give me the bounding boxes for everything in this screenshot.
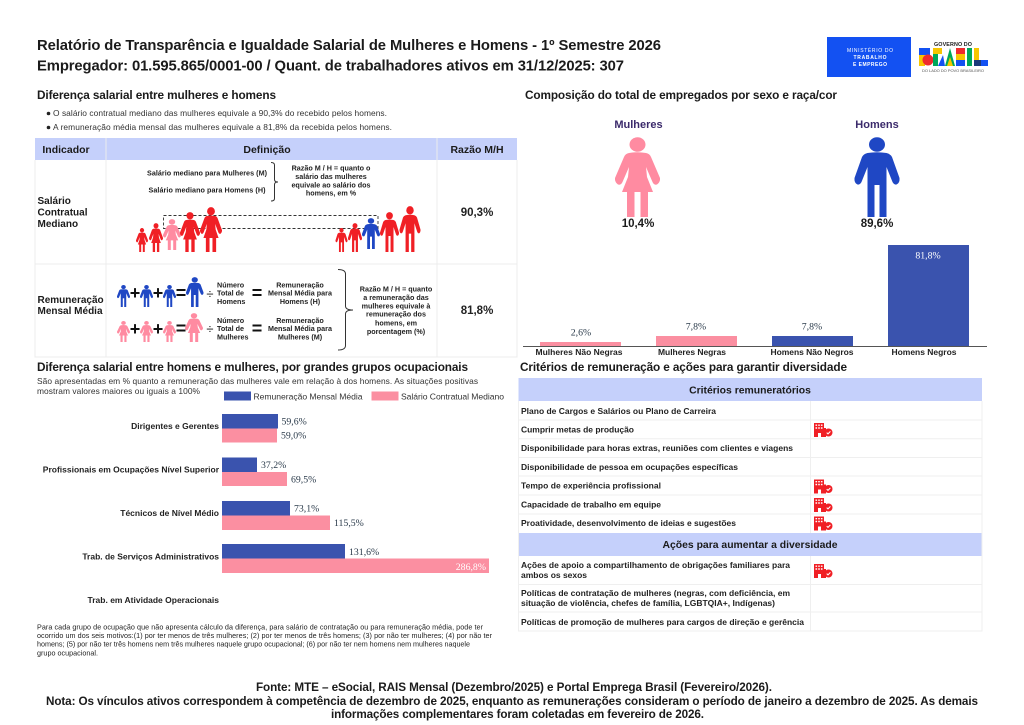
formula: homens: Remuneração	[276, 280, 324, 290]
group: profissionais: 69,5%	[291, 474, 316, 486]
formula: mulheres: +	[130, 319, 140, 339]
chart legend	[224, 392, 504, 402]
definition: salário mediano: homens, em %	[306, 188, 357, 198]
group: profissionais: 37,2%	[261, 460, 286, 471]
footnote: Para cada grupo de ocupação que não apresenta cálculo da diferença, para salário de contratação ou para remuneração média, pode ter	[37, 622, 484, 632]
group: técnicos: 73,1%	[294, 504, 319, 514]
text: razão M/H: porcentagem (%)	[367, 327, 426, 336]
formula: mulheres: Remuneração	[276, 316, 324, 325]
group: dirigentes e gerentes: Dirigentes e Gerentes	[131, 421, 219, 431]
bar chart: composição por sexo e raça/cor: Homens Não Negros	[770, 347, 854, 357]
text: razão M/H: Razão M / H = quanto	[360, 284, 433, 294]
bullet text block: O salário contratual mediano das mulheres equivale a 90,3% do recebido pelos homens.	[53, 108, 387, 118]
definition: salário mediano	[136, 162, 421, 252]
footnote: ocorrido um dos seis motivos:(1) por ter menos de três mulheres; (2) por ter menos de três homens; (3) por não ter mulheres; (4) por não ter	[37, 631, 493, 640]
footer: fonte e nota: Nota: Os vínculos ativos correspondem à competência de dezembro de 2025, enquanto as remunerações consideram o período de janeiro a dezembro de 2025. As demais	[46, 695, 978, 708]
criteria list: Plano de Cargos e Salários ou Plano de Carreira	[521, 406, 716, 416]
text: razão M/H: remuneração dos	[366, 310, 426, 318]
formula: homens	[117, 277, 333, 307]
group: serviços administrativos: Trab. de Serviços Administrativos	[82, 552, 219, 562]
value: razão remuneração média: 81,8%	[461, 305, 493, 317]
criteria list	[521, 406, 793, 528]
heading: composição: Composição do total de empregados por sexo e raça/cor	[525, 88, 837, 102]
definition: salário mediano: salário das mulheres	[295, 172, 367, 181]
icon: cumprir metas	[814, 423, 832, 437]
text: razão M/H	[360, 284, 433, 336]
chart legend: Remuneração Mensal Média	[254, 392, 363, 402]
formula: mulheres: ÷	[206, 322, 214, 336]
chart legend: Salário Contratual Mediano	[401, 392, 504, 402]
formula: homens: +	[153, 283, 163, 303]
bar chart: composição por sexo e raça/cor: 2,6%	[571, 328, 591, 338]
actions list: Ações de apoio a compartilhamento de obrigações familiares para	[521, 560, 790, 570]
definition: salário mediano: Salário mediano para Homens (H)	[148, 186, 266, 194]
bar chart: grupos ocupacionais	[43, 414, 489, 605]
logo: Governo do Brasil: GOVERNO DO	[934, 42, 972, 48]
formula: mulheres: =	[176, 318, 186, 338]
value: razão salário contratual: 90,3%	[461, 207, 493, 219]
actions list: Políticas de contratação de mulheres (negras, com deficiência, em	[521, 588, 790, 598]
actions list: situação de violência, chefes de família, LGBTQIA+, Indígenas)	[521, 598, 775, 608]
icon: mulheres 10,4%	[614, 119, 663, 230]
bullet text block	[47, 108, 392, 132]
band: ações para aumentar a diversidade: Ações para aumentar a diversidade	[662, 540, 838, 551]
text: descrição do gráfico: mostram valores maiores ou iguais a 100%	[37, 386, 201, 396]
row label: salário contratual mediano	[38, 196, 88, 230]
title: Relatório de Transparência e Igualdade Salarial de Mulheres e Homens - 1º Semestre 2026	[37, 38, 661, 54]
logo: Ministério do Trabalho e Emprego: TRABALHO	[854, 55, 887, 61]
bar chart: composição por sexo e raça/cor: Mulheres Não Negras	[536, 347, 623, 357]
footnote: homens; (5) por não ter três homens nem três mulheres naquele grupo ocupacional; (6) por não ter nem homens nem mulheres naquele	[37, 640, 470, 648]
definition: salário mediano: Salário mediano para Mulheres (M)	[147, 168, 268, 178]
criteria list: Capacidade de trabalho em equipe	[521, 500, 661, 510]
row label: salário contratual mediano: Contratual	[38, 208, 88, 218]
formula: homens: Homens (H)	[280, 297, 321, 306]
bar chart: composição por sexo e raça/cor: Homens Negros	[892, 347, 957, 357]
icon: tempo de experiência	[814, 480, 832, 494]
footer: fonte e nota: informações complementares foram coletadas em fevereiro de 2026.	[331, 708, 704, 721]
text: descrição do gráfico	[37, 376, 478, 396]
row label: remuneração mensal média: Remuneração	[38, 295, 104, 306]
formula: homens: Número	[217, 280, 245, 290]
group: dirigentes e gerentes	[131, 414, 307, 442]
icons: mulheres ordenadas por salário	[136, 207, 222, 252]
group: técnicos: Técnicos de Nível Médio	[120, 508, 219, 518]
footnote: grupo ocupacional.	[37, 648, 98, 658]
band: critérios remuneratórios: Critérios remuneratórios	[689, 386, 811, 396]
actions list	[521, 560, 804, 627]
table header	[42, 144, 504, 156]
panel: tabela de indicadores	[35, 138, 517, 357]
formula: homens: Homens	[217, 297, 245, 306]
criteria list: Tempo de experiência profissional	[521, 480, 661, 490]
icon: homens 89,6%: 89,6%	[861, 218, 893, 230]
table header: Definição	[243, 144, 291, 156]
table header: Razão M/H	[450, 144, 504, 156]
formula: homens: ÷	[206, 286, 214, 302]
formula: mulheres: =	[252, 318, 262, 338]
bar chart: composição por sexo e raça/cor: Mulheres Negras	[658, 347, 726, 357]
text: descrição do gráfico: São apresentadas em % quanto a remuneração das mulheres vale em relação à dos homens. As situações positivas	[37, 376, 478, 386]
actions list: Políticas de promoção de mulheres para cargos de direção e gerência	[521, 617, 804, 627]
heading: critérios de remuneração: Critérios de remuneração e ações para garantir diversidade	[520, 360, 847, 374]
definition: salário mediano: equivale ao salário dos	[291, 180, 371, 190]
bullet text block: A remuneração média mensal das mulheres equivale a 81,8% da recebida pelos homens.	[53, 122, 392, 132]
formula: homens: +	[130, 283, 140, 303]
text: razão M/H: a remuneração das	[363, 293, 429, 302]
title: Empregador: 01.595.865/0001-00 / Quant. de trabalhadores ativos em 31/12/2025: 307	[37, 58, 624, 74]
bar chart: composição por sexo e raça/cor: 81,8%	[915, 250, 941, 262]
formula: mulheres: Mensal Média para	[268, 324, 333, 333]
formula: mulheres: Mulheres	[217, 332, 249, 342]
formula: homens: =	[176, 283, 186, 303]
group: atividade operacionais: Trab. em Atividade Operacionais	[88, 595, 219, 605]
formula: mulheres: Número	[217, 316, 245, 325]
row label: remuneração mensal média: Mensal Média	[38, 306, 103, 317]
logo: Governo do Brasil	[919, 42, 988, 73]
icon: proatividade	[814, 516, 832, 530]
group: dirigentes e gerentes: 59,0%	[281, 430, 306, 442]
logo: Ministério do Trabalho e Emprego: E EMPREGO	[853, 62, 887, 68]
icon: capacidade de trabalho	[814, 498, 832, 512]
formula: homens: Mensal Média para	[268, 288, 333, 298]
logo: Ministério do Trabalho e Emprego: MINISTÉRIO DO	[847, 47, 893, 54]
icon: homens 89,6%: Homens	[855, 119, 899, 131]
criteria list: Proatividade, desenvolvimento de ideias e sugestões	[521, 518, 736, 528]
group: serviços administrativos: 131,6%	[349, 547, 379, 558]
row label: remuneração mensal média	[38, 295, 104, 317]
icon: homens 89,6%	[854, 119, 900, 230]
formula: mulheres	[117, 313, 333, 342]
group: profissionais	[43, 458, 316, 486]
row label: salário contratual mediano: Salário	[38, 196, 71, 207]
bar chart: composição por sexo e raça/cor	[523, 245, 987, 357]
icon: ações de apoio	[814, 564, 832, 578]
text: razão M/H: mulheres equivale à	[362, 302, 431, 310]
criteria list: Disponibilidade de pessoa em ocupações específicas	[521, 462, 738, 472]
panel: critérios e ações	[518, 378, 982, 631]
actions list: ambos os sexos	[521, 570, 587, 580]
formula: homens: Total de	[217, 288, 244, 298]
heading: diferença por grupos ocupacionais: Diferença salarial entre homens e mulheres, por grandes grupos ocupacionais	[37, 360, 468, 374]
formula: mulheres: Total de	[217, 324, 244, 333]
definition: salário mediano: Razão M / H = quanto o	[292, 164, 371, 172]
group: técnicos: 115,5%	[334, 518, 364, 529]
row label: salário contratual mediano: Mediano	[38, 219, 78, 230]
logo: Governo do Brasil: DO LADO DO POVO BRASILEIRO	[922, 68, 984, 73]
criteria list: Cumprir metas de produção	[521, 424, 634, 434]
bar chart: composição por sexo e raça/cor: 7,8%	[686, 322, 706, 332]
footer: fonte e nota: Fonte: MTE – eSocial, RAIS Mensal (Dezembro/2025) e Portal Emprega Brasil (Fevereiro/2026).	[256, 681, 772, 694]
icon: mulheres 10,4%: 10,4%	[622, 218, 654, 230]
group: técnicos	[120, 501, 364, 530]
footer: fonte e nota	[46, 681, 978, 721]
bar chart: composição por sexo e raça/cor: 7,8%	[802, 322, 822, 332]
definition: remuneração média	[117, 270, 433, 350]
formula: mulheres: Mulheres (M)	[278, 332, 323, 342]
table header: Indicador	[42, 144, 90, 156]
group: dirigentes e gerentes: 59,6%	[282, 416, 307, 428]
formula: mulheres: +	[153, 319, 163, 339]
icon: mulheres 10,4%: Mulheres	[614, 119, 663, 131]
heading: diferença salarial entre mulheres e homens: Diferença salarial entre mulheres e homens	[37, 88, 276, 102]
group: serviços administrativos	[82, 544, 489, 573]
formula: homens: =	[252, 283, 262, 303]
group: profissionais: Profissionais em Ocupações Nível Superior	[43, 464, 220, 474]
logo: Ministério do Trabalho e Emprego	[827, 37, 911, 77]
group: serviços administrativos: 286,8%	[456, 562, 486, 573]
text: razão M/H: homens, em	[375, 318, 417, 328]
title	[37, 38, 661, 74]
footnote	[37, 622, 493, 658]
criteria list: Disponibilidade para horas extras, reuniões com clientes e viagens	[521, 443, 793, 453]
icons: homens ordenados por salário	[335, 206, 421, 252]
